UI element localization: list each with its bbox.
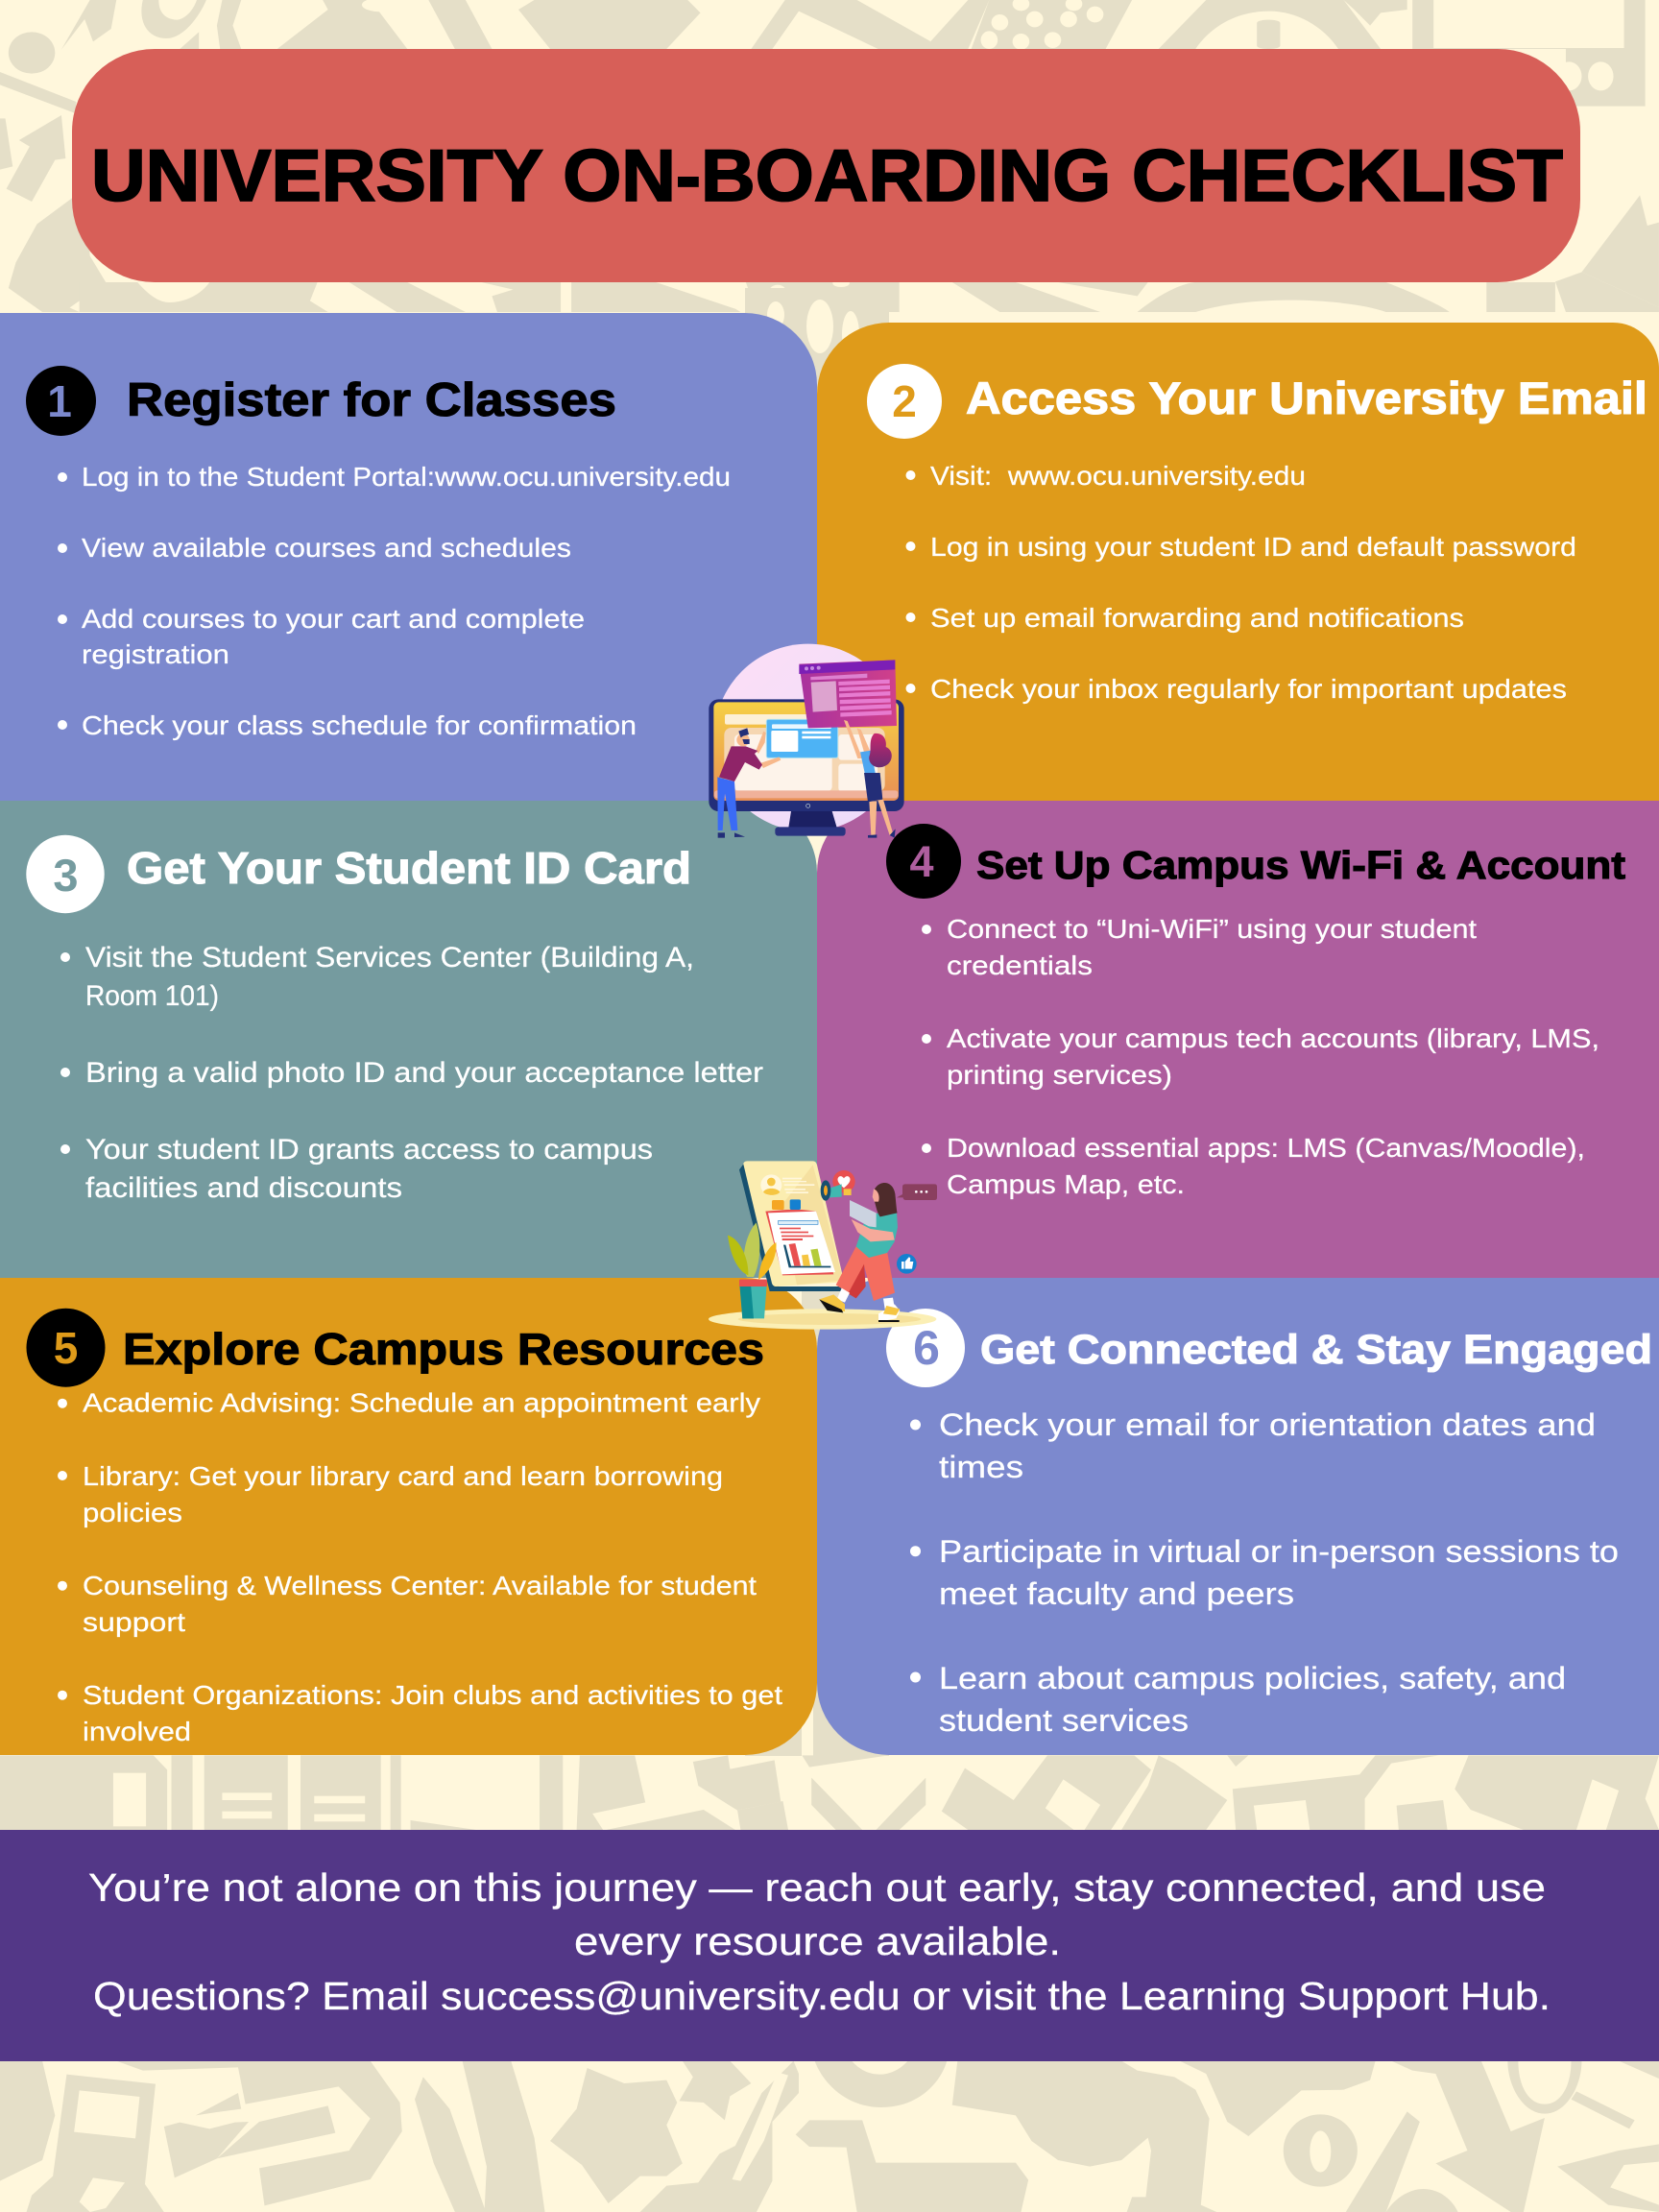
step number 6: 6 (913, 1321, 940, 1375)
step number 3: 3 (53, 850, 79, 901)
list 6: Check your email for orientation dates and (939, 1407, 1596, 1442)
list 5 (58, 1388, 782, 1746)
list 2: Log in using your student ID and default password (930, 532, 1576, 562)
list 5: Student Organizations: Join clubs and activities to get (83, 1680, 782, 1710)
list 3: Room 101) (85, 980, 219, 1012)
footer message: every resource available. (574, 1919, 1061, 1963)
list 5: Counseling & Wellness Center: Available for student (83, 1571, 757, 1600)
step number 5 (27, 1309, 106, 1387)
list 6: Participate in virtual or in-person sessions to (939, 1534, 1619, 1569)
illustration: people arranging windows on a monitor (709, 644, 904, 838)
list 6 (910, 1407, 1619, 1738)
step number 6 (886, 1309, 965, 1387)
list 5: policies (83, 1498, 182, 1527)
list 4: Campus Map, etc. (947, 1169, 1185, 1199)
list 4 (922, 914, 1599, 1199)
list 1: registration (82, 639, 229, 669)
panel 3: student id card (0, 801, 817, 1278)
step number 2 (867, 364, 942, 439)
heading 2: Access Your University Email (966, 373, 1647, 423)
panel 1: register for classes (0, 313, 817, 801)
step number 1: 1 (47, 376, 72, 426)
list 1: Check your class schedule for confirmation (82, 710, 637, 740)
list 3: Your student ID grants access to campus (85, 1134, 653, 1166)
list 5: Library: Get your library card and learn borrowing (83, 1461, 723, 1491)
step number 5: 5 (54, 1323, 78, 1373)
list 2 (906, 461, 1576, 704)
list 5: involved (83, 1717, 191, 1746)
illustration: woman with megaphone beside analytics board (709, 1161, 937, 1330)
heading 5: Explore Campus Resources (123, 1324, 764, 1374)
heading 3: Get Your Student ID Card (127, 843, 691, 893)
list 1: View available courses and schedules (82, 533, 571, 563)
list 3: Bring a valid photo ID and your acceptance letter (85, 1057, 763, 1089)
title banner (72, 49, 1580, 282)
list 1: Log in to the Student Portal:www.ocu.university.edu (82, 462, 731, 492)
step number 3 (26, 835, 105, 913)
list 6: meet faculty and peers (939, 1576, 1294, 1611)
list 4: Download essential apps: LMS (Canvas/Moodle), (947, 1133, 1585, 1163)
list 4: Activate your campus tech accounts (library, LMS, (947, 1023, 1599, 1053)
list 1: Add courses to your cart and complete (82, 604, 585, 634)
list 3: Visit the Student Services Center (Building A, (85, 942, 694, 974)
list 4: credentials (947, 950, 1093, 980)
heading 4: Set Up Campus Wi-Fi & Account (976, 843, 1625, 887)
footer message: You’re not alone on this journey — reach out early, stay connected, and use (88, 1865, 1546, 1910)
list 3 (60, 942, 763, 1204)
footer message: Questions? Email success@university.edu or visit the Learning Support Hub. (93, 1974, 1551, 2018)
footer message (88, 1865, 1551, 2018)
heading 6: Get Connected & Stay Engaged (980, 1327, 1652, 1373)
list 1 (58, 462, 731, 740)
step number 2: 2 (892, 376, 917, 426)
list 2: Visit: www.ocu.university.edu (930, 461, 1306, 491)
panel 6: get connected (817, 1278, 1659, 1755)
panel 2: university email (817, 323, 1659, 801)
list 2: Set up email forwarding and notifications (930, 603, 1464, 633)
heading 1: Register for Classes (127, 374, 616, 426)
panel 4: wi-fi and account (817, 801, 1659, 1278)
list 5: Academic Advising: Schedule an appointment early (83, 1388, 760, 1417)
list 4: Connect to “Uni-WiFi” using your student (947, 914, 1477, 944)
list 6: times (939, 1450, 1023, 1484)
list 5: support (83, 1607, 185, 1637)
title: UNIVERSITY ON-BOARDING CHECKLIST (91, 135, 1563, 217)
step number 4: 4 (909, 837, 934, 886)
list 2: Check your inbox regularly for important updates (930, 674, 1567, 704)
step number 1 (26, 366, 96, 436)
list 6: student services (939, 1703, 1189, 1738)
list 3: facilities and discounts (85, 1172, 402, 1204)
list 6: Learn about campus policies, safety, and (939, 1661, 1566, 1695)
footer banner (0, 1830, 1659, 2061)
panel 5: campus resources (0, 1278, 817, 1755)
step number 4 (886, 824, 961, 899)
list 4: printing services) (947, 1060, 1172, 1090)
